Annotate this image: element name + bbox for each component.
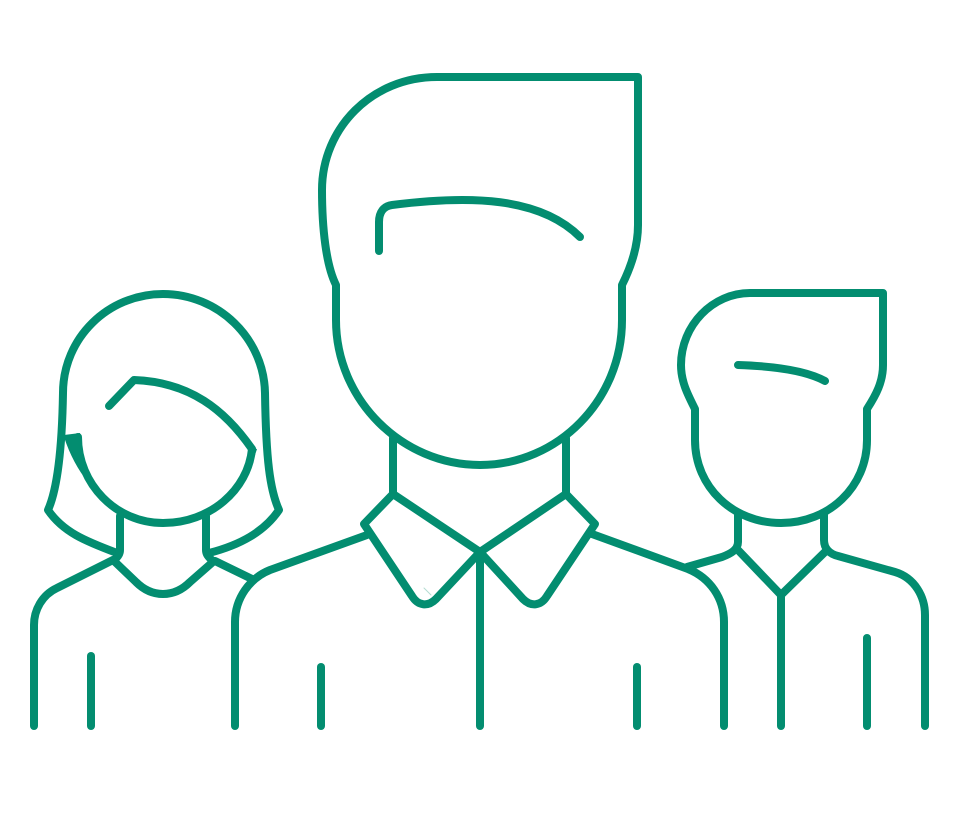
woman fringe [109,380,252,449]
centre man right arm line [633,667,641,726]
woman hair [48,294,279,553]
centre man right shoulder and arm [592,534,724,726]
right man arm line [863,638,871,726]
figure: man on right [681,293,925,726]
centre man centre line [476,552,484,726]
woman neckline [113,560,214,594]
right man fringe [738,365,825,381]
figure: woman on left [34,294,279,726]
centre man left arm line [317,667,325,726]
right man head and hair [681,293,883,523]
centre man fringe [379,200,580,251]
centre man collar outline [364,494,595,604]
right man centre line [777,595,785,726]
woman neck [114,516,213,561]
woman right shoulder [215,561,252,579]
collar mark [424,588,431,595]
right man V collar [737,549,827,595]
woman hair wedge right [238,447,257,488]
woman hair wedge left [64,433,88,482]
centre man head and hair [322,77,638,465]
centre man left shoulder and arm [235,535,367,726]
figure: man in centre [235,77,724,726]
woman left shoulder and arm [34,560,113,726]
right man neck and left shoulder [687,515,738,567]
woman arm line [87,656,95,726]
centre man neck [393,438,566,494]
right man neck and right shoulder [824,515,925,726]
woman face [78,437,252,523]
